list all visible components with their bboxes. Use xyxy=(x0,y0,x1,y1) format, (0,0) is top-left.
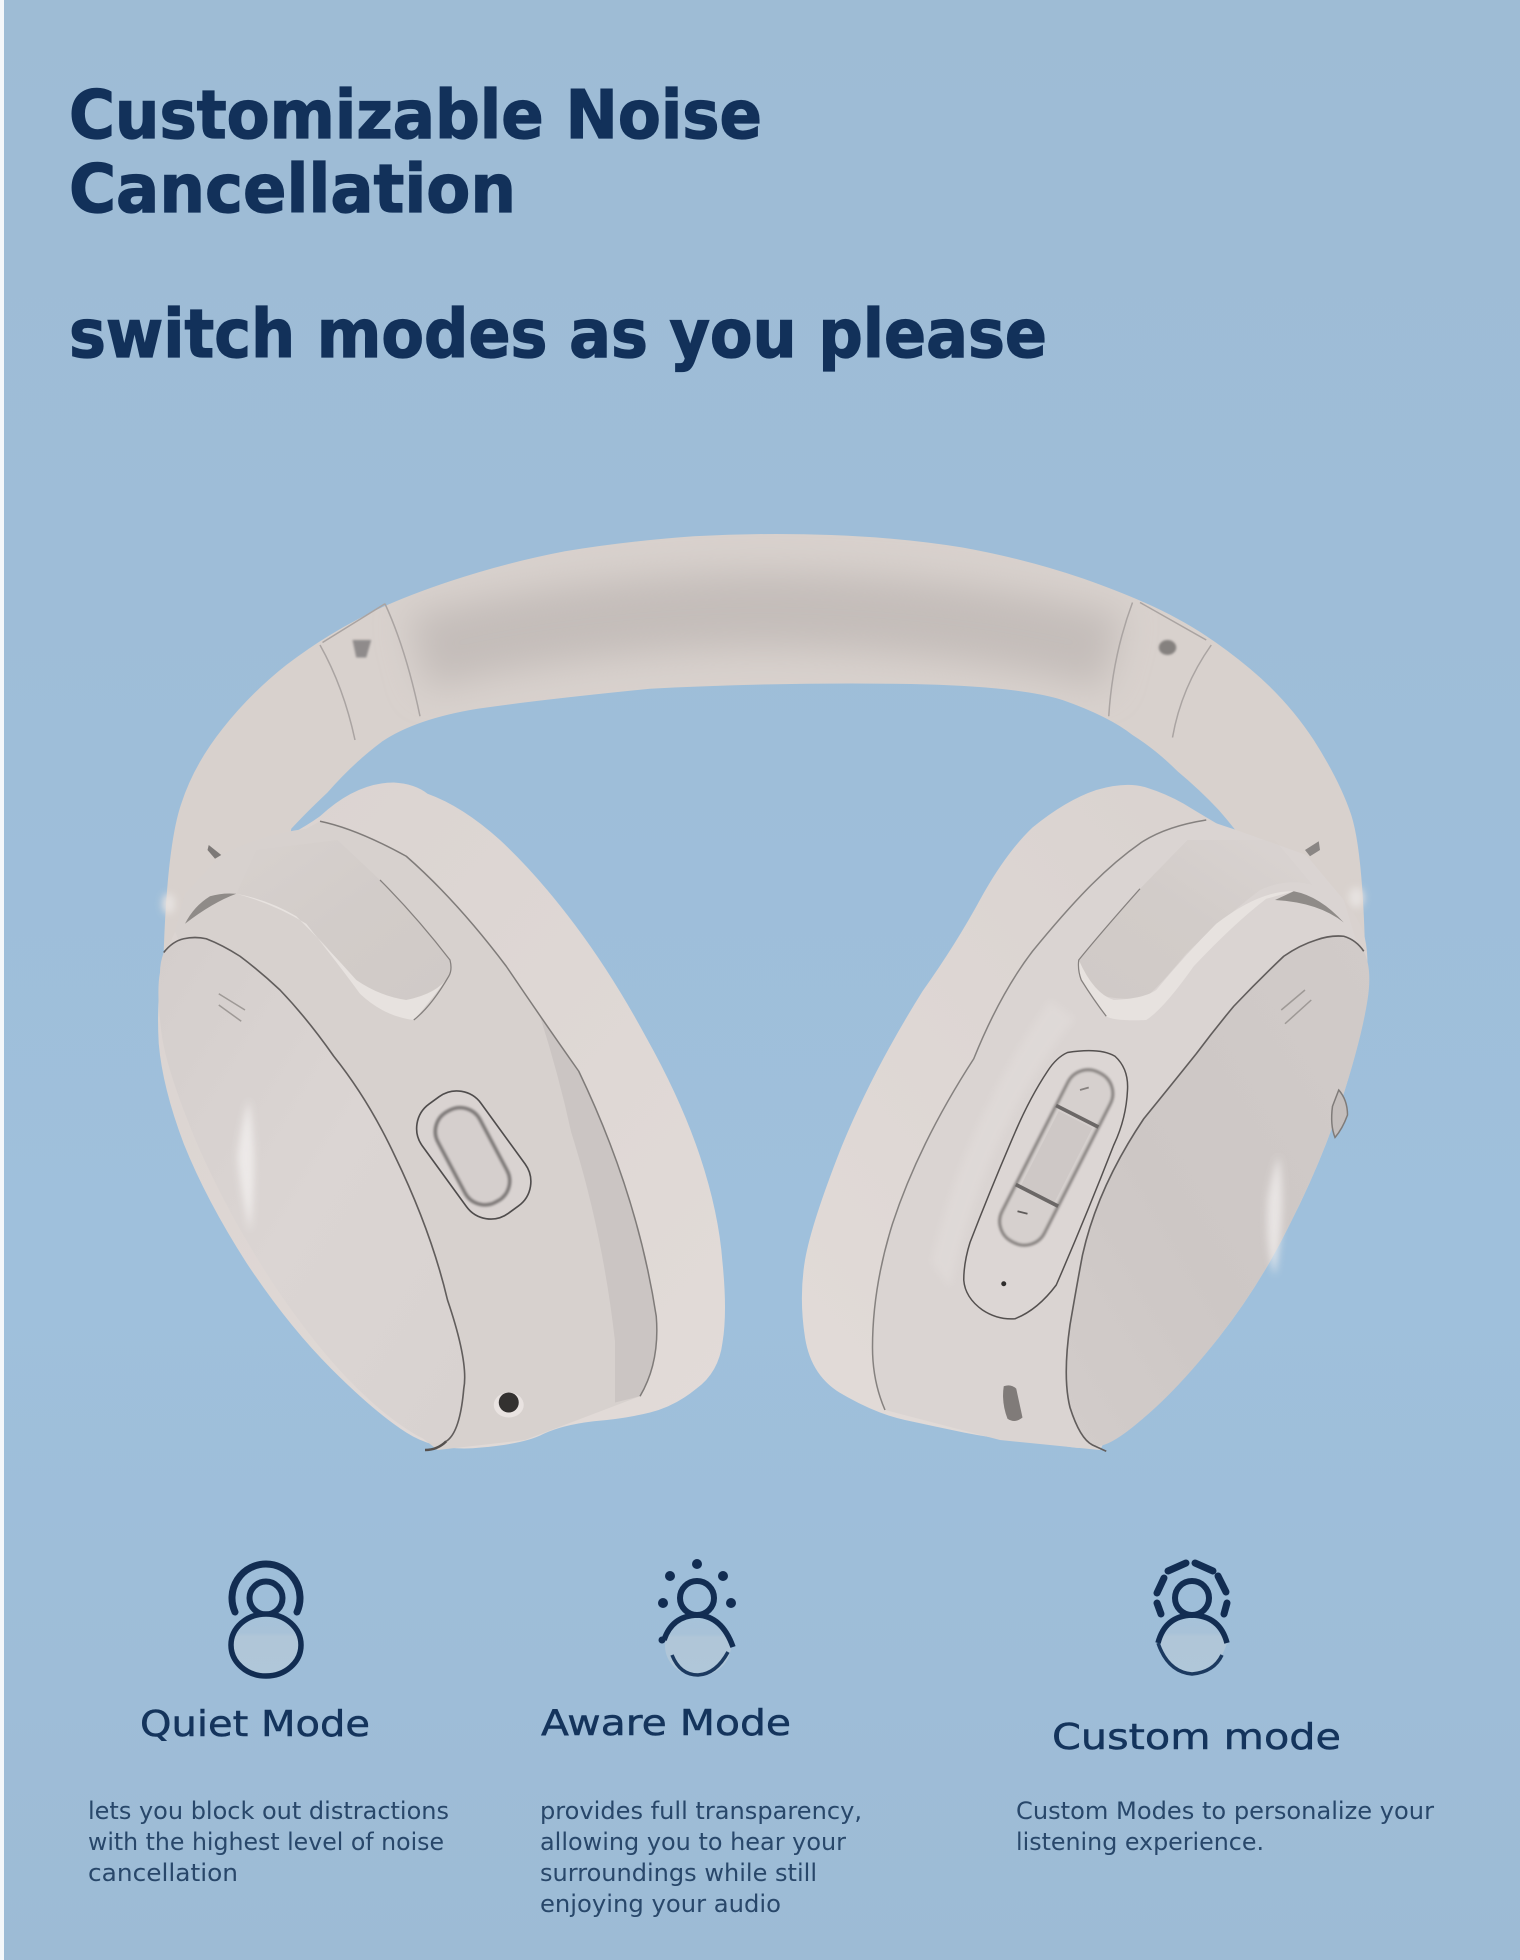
headphones illustration xyxy=(158,534,1369,1451)
description: custom mode xyxy=(1016,1797,1434,1856)
housing inside seam xyxy=(872,820,1362,1450)
left ear cup xyxy=(158,782,725,1450)
heading: aware mode: Aware Mode xyxy=(541,1703,791,1744)
icon: aware mode xyxy=(658,1559,736,1676)
description: aware mode: surroundings while still xyxy=(540,1859,817,1887)
right ear cup xyxy=(802,785,1369,1451)
headband xyxy=(162,534,1365,950)
housing inside seam xyxy=(175,821,657,1450)
heading: quiet mode: Quiet Mode xyxy=(140,1704,370,1745)
heading line: switch modes as you please: switch modes as you please xyxy=(69,295,1047,373)
glare xyxy=(1267,1156,1282,1275)
right hinge xyxy=(1109,602,1211,738)
cap plate xyxy=(158,938,465,1443)
panel: quiet mode xyxy=(88,1704,449,1887)
description: quiet mode: with the highest level of noise xyxy=(88,1828,444,1856)
left hinge xyxy=(320,604,420,740)
mode button xyxy=(405,1079,543,1231)
darker strip xyxy=(540,1016,657,1402)
description: aware mode: allowing you to hear your xyxy=(540,1828,846,1856)
side switch xyxy=(1332,1090,1348,1138)
vent mark xyxy=(219,994,245,1021)
cushion xyxy=(158,782,725,1448)
glare xyxy=(238,1100,254,1231)
description: quiet mode xyxy=(88,1797,449,1887)
title xyxy=(69,76,1047,373)
panel: custom mode xyxy=(1016,1717,1434,1856)
cushion xyxy=(802,785,1368,1448)
yoke xyxy=(185,840,451,1020)
heading line: Cancellation: Cancellation xyxy=(69,150,516,228)
description: aware mode xyxy=(540,1797,862,1918)
yoke xyxy=(1078,840,1344,1020)
audio jack xyxy=(494,1392,524,1418)
remote panel xyxy=(964,1051,1128,1319)
description: aware mode: enjoying your audio xyxy=(540,1890,781,1918)
heading line: Customizable Noise: Customizable Noise xyxy=(69,76,762,154)
panel: aware mode xyxy=(540,1703,862,1918)
cap plate xyxy=(1066,936,1369,1446)
description: quiet mode: lets you block out distractions xyxy=(88,1797,449,1825)
description: aware mode: provides full transparency, xyxy=(540,1797,862,1825)
description: custom mode: Custom Modes to personalize your xyxy=(1016,1797,1434,1825)
icon: custom mode xyxy=(1157,1563,1227,1674)
description: quiet mode: cancellation xyxy=(88,1859,238,1887)
heading: custom mode: Custom mode xyxy=(1052,1717,1341,1758)
volume rocker xyxy=(992,1062,1121,1253)
vent mark xyxy=(1281,990,1311,1024)
description: custom mode: listening experience. xyxy=(1016,1828,1264,1856)
microphone slot xyxy=(1003,1385,1022,1421)
icon: quiet mode xyxy=(231,1564,301,1676)
